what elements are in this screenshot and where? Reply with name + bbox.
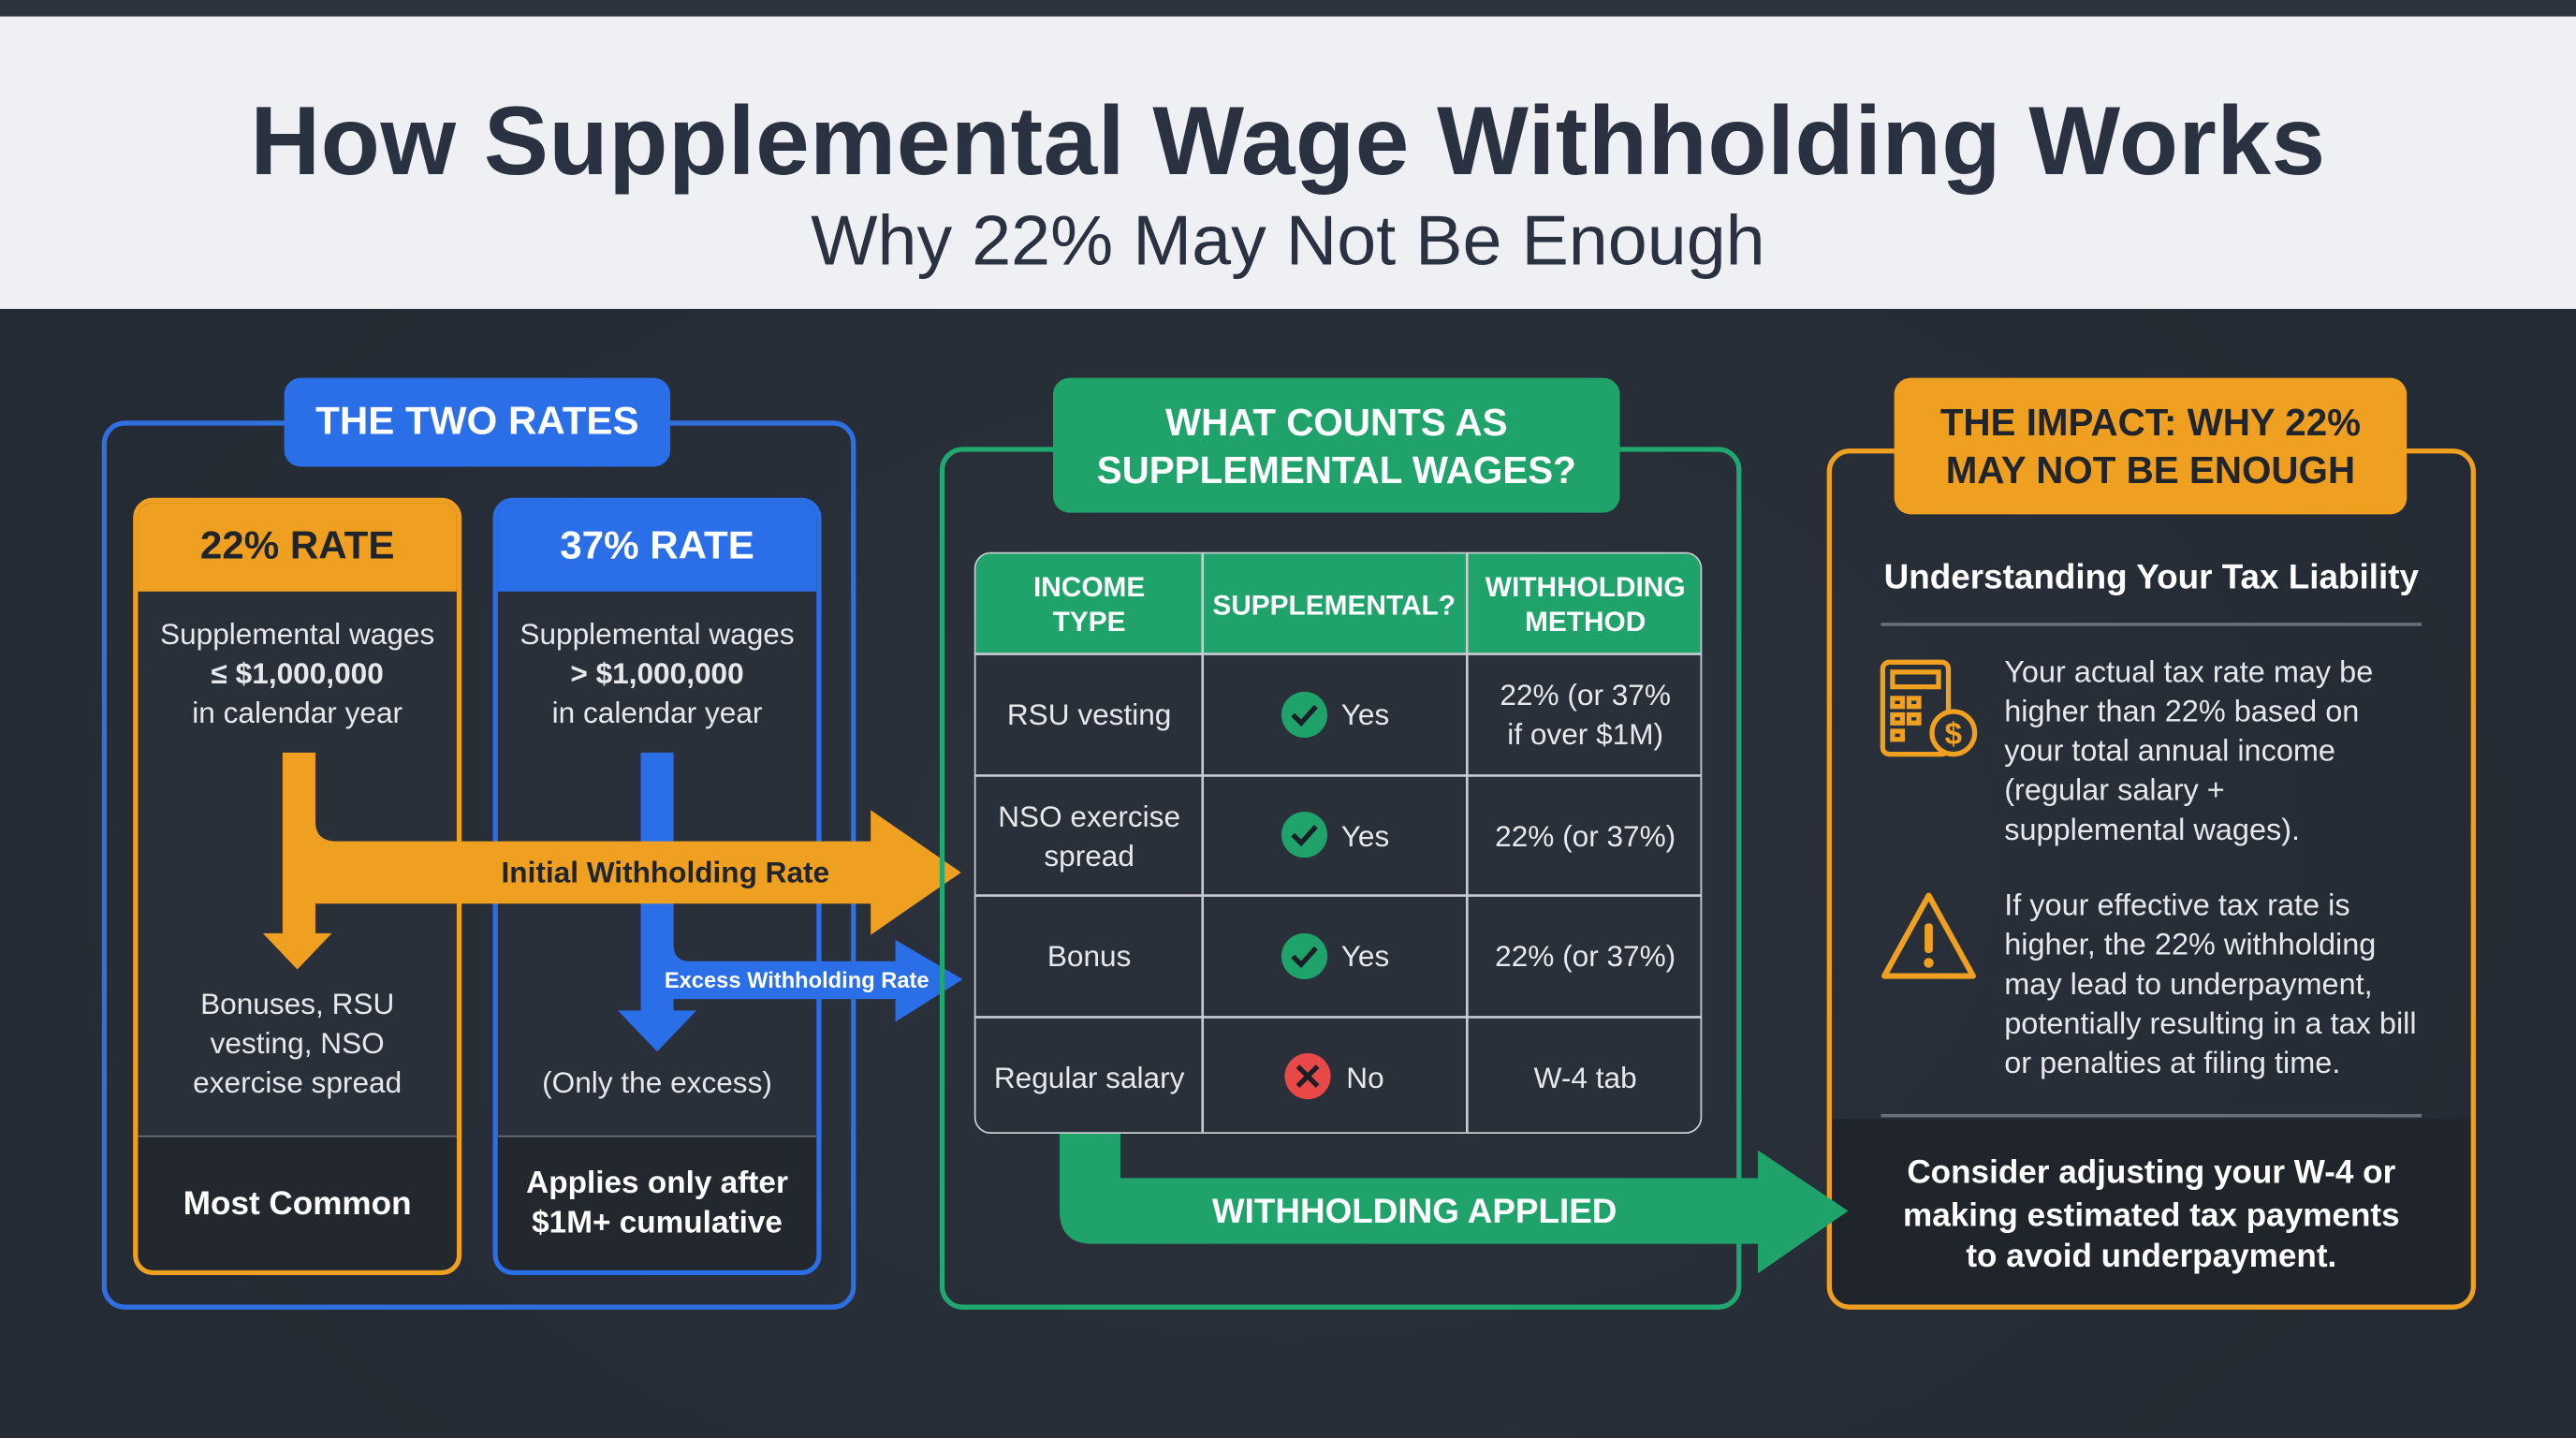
table: supplemental wages: INCOME	[1033, 572, 1145, 603]
text: effective tax rate: higher, the 22% withholding	[2004, 927, 2376, 961]
arrow: excess withholding rate: Excess Withholding Rate	[665, 969, 929, 993]
heading: the two rates: THE TWO RATES	[315, 399, 639, 444]
text: effective tax rate	[2004, 888, 2417, 1079]
heading: the impact: THE IMPACT: WHY 22%	[1940, 401, 2361, 444]
heading: what counts: SUPPLEMENTAL WAGES?	[1097, 448, 1576, 492]
table: supplemental wages: W-4 tab	[1534, 1061, 1637, 1094]
text: actual tax rate	[2004, 654, 2373, 846]
footer: most common	[138, 1136, 457, 1275]
text: 37% condition: > $1,000,000	[570, 657, 744, 690]
heading: the impact	[1895, 378, 2407, 514]
footer: most common: Most Common	[183, 1186, 412, 1223]
arrow: initial withholding rate	[262, 753, 961, 970]
panel: what counts as supplemental	[940, 447, 1741, 1310]
subheading: understanding tax liability: Understanding Your Tax Liability	[1884, 559, 2419, 596]
text: 37% condition: Supplemental wages	[520, 618, 795, 651]
table: supplemental wages: Yes	[1341, 819, 1389, 853]
text: examples: vesting, NSO	[211, 1027, 385, 1060]
table: supplemental wages: SUPPLEMENTAL?	[1212, 590, 1456, 621]
table: supplemental wages: Yes	[1341, 697, 1389, 731]
arrow: withholding applied: WITHHOLDING APPLIED	[1212, 1192, 1617, 1230]
table: supplemental wages: TYPE	[1053, 607, 1126, 638]
table: supplemental wages: No	[1346, 1061, 1384, 1094]
footer: consider adjusting: to avoid underpayment.	[1966, 1239, 2336, 1275]
card header 22%	[138, 503, 457, 592]
panel: the impact	[1827, 448, 2476, 1310]
text: 22% condition: Supplemental wages	[160, 618, 434, 651]
arrow: withholding applied	[1060, 1134, 1848, 1273]
text: examples: exercise spread	[193, 1066, 402, 1099]
text: examples	[193, 988, 402, 1099]
footer: applies after 1M	[498, 1136, 816, 1275]
footer: applies after 1M: Applies only after	[526, 1167, 788, 1201]
card header 37%: 37% RATE	[560, 524, 754, 568]
text: actual tax rate: your total annual income	[2004, 733, 2335, 768]
card header 22%: 22% RATE	[200, 524, 394, 568]
footer: applies after 1M: $1M+ cumulative	[532, 1206, 783, 1240]
text: effective tax rate: If your effective tax rate is	[2004, 888, 2350, 922]
table: supplemental wages: Regular salary	[994, 1061, 1185, 1094]
card: 22% rate	[133, 498, 461, 1275]
text: 37% condition: in calendar year	[552, 697, 762, 729]
card header 37%	[498, 503, 816, 592]
title: How Supplemental Wage Withholding Works	[250, 87, 2326, 196]
panel: the two rates	[102, 420, 856, 1310]
table: supplemental wages: NSO exercise	[998, 800, 1180, 833]
text: effective tax rate: or penalties at filing time.	[2004, 1045, 2340, 1079]
text: actual tax rate: (regular salary +	[2004, 772, 2225, 807]
table: supplemental wages: 22% (or 37%)	[1495, 819, 1676, 853]
card: 37% rate	[493, 498, 822, 1275]
text: actual tax rate: Your actual tax rate may be	[2004, 654, 2373, 688]
header band	[0, 0, 2576, 309]
table: supplemental wages: Bonus	[1047, 939, 1131, 973]
text: effective tax rate: potentially resulting in a tax bill	[2004, 1005, 2417, 1040]
arrow: excess withholding rate	[618, 753, 962, 1052]
text: 22% condition: ≤ $1,000,000	[212, 657, 384, 690]
table: supplemental wages	[974, 552, 1702, 1134]
table: supplemental wages: spread	[1044, 839, 1134, 873]
heading: the two rates	[285, 378, 670, 466]
heading: what counts: WHAT COUNTS AS	[1165, 401, 1508, 444]
text: 37% condition	[520, 618, 795, 729]
text: only the excess: (Only the excess)	[542, 1066, 772, 1099]
footer: consider adjusting: Consider adjusting your W-4 or	[1907, 1155, 2395, 1191]
table: supplemental wages: RSU vesting	[1007, 697, 1171, 731]
table: supplemental wages: WITHHOLDING	[1486, 572, 1686, 603]
table: supplemental wages: if over $1M)	[1507, 717, 1663, 751]
heading: what counts	[1053, 378, 1620, 513]
table: supplemental wages: 22% (or 37%	[1500, 678, 1671, 712]
icon: warning	[1881, 893, 1976, 979]
text: actual tax rate: supplemental wages).	[2004, 812, 2300, 846]
text: 22% condition: in calendar year	[192, 697, 402, 729]
text: actual tax rate: higher than 22% based on	[2004, 694, 2359, 728]
footer: consider adjusting	[1832, 1119, 2471, 1316]
text: 22% condition	[160, 618, 434, 729]
table: supplemental wages: Yes	[1341, 939, 1389, 973]
arrow: initial withholding rate: Initial Withholding Rate	[502, 855, 829, 888]
footer: consider adjusting: making estimated tax payments	[1903, 1197, 2400, 1233]
icon: calculator: $	[1945, 717, 1963, 752]
icon: calculator	[1880, 659, 1977, 756]
heading: the impact: MAY NOT BE ENOUGH	[1946, 448, 2355, 492]
text: effective tax rate: may lead to underpayment,	[2004, 966, 2373, 1001]
table: supplemental wages: METHOD	[1525, 607, 1646, 638]
text: examples: Bonuses, RSU	[200, 988, 394, 1020]
subtitle: Why 22% May Not Be Enough	[811, 202, 1765, 281]
table: supplemental wages: 22% (or 37%)	[1495, 939, 1676, 973]
